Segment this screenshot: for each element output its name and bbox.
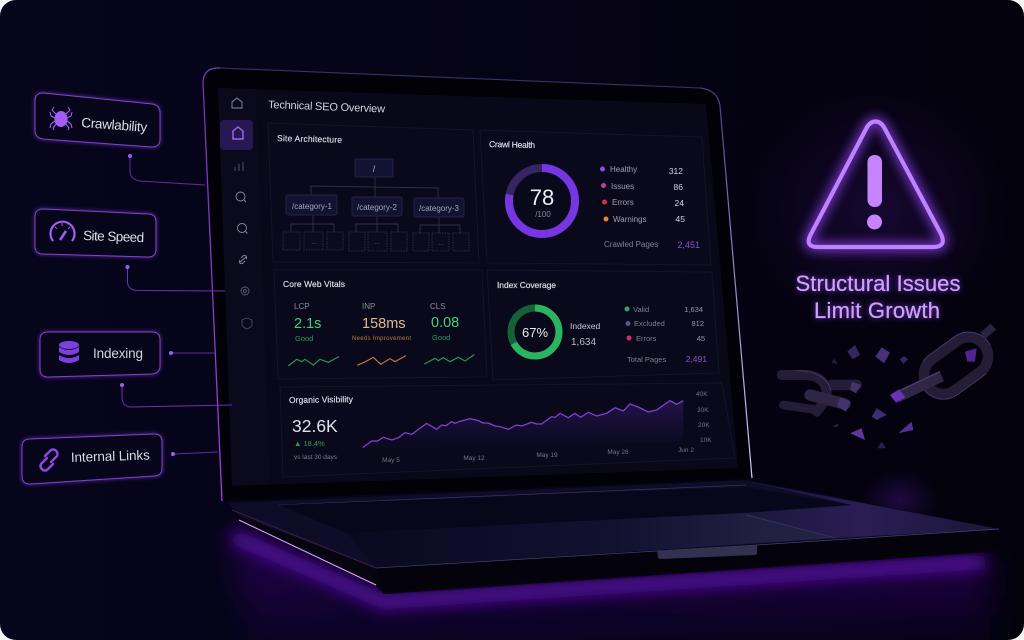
legend: crawl status: Errors <box>612 198 634 207</box>
icon: speed gauge <box>50 222 75 241</box>
panel: organic visibility: Organic Visibility <box>289 394 354 405</box>
panel: site architecture: /category-2 <box>357 203 398 212</box>
panel: index coverage: 1,634 <box>571 337 596 348</box>
panel: core web vitals: Good <box>295 334 313 343</box>
panel: crawl health: 78 <box>530 185 554 210</box>
legend: index status: 812 <box>691 319 704 328</box>
panel: core web vitals: CLS <box>430 302 446 311</box>
donut: 67% indexed <box>511 308 559 356</box>
label: Internal Links <box>22 434 162 484</box>
legend: crawl status: Crawled Pages <box>604 240 658 249</box>
panel: site architecture: ... <box>311 240 317 246</box>
floor glow under laptop <box>232 536 990 640</box>
panel: crawl health: /100 <box>535 210 551 219</box>
icon: chain link <box>41 450 57 470</box>
panel: organic visibility: 20K <box>698 422 710 429</box>
text: Structural Issues Limit Growth <box>796 271 960 323</box>
legend: crawl status: 86 <box>674 182 683 192</box>
legend: index status: 45 <box>697 334 705 343</box>
panel: site architecture: ... <box>438 241 444 247</box>
legend: crawl status: Issues <box>611 182 634 191</box>
panel: organic visibility: May 19 <box>536 452 558 459</box>
legend: crawl status: 312 <box>669 166 683 176</box>
panel: index coverage: Index Coverage <box>497 280 556 290</box>
panel: organic visibility: vs last 30 days <box>294 454 338 461</box>
panel: organic visibility: 40K <box>696 391 708 398</box>
legend: crawl status: 24 <box>675 198 684 208</box>
left chain <box>782 371 857 412</box>
panel: core web vitals <box>274 270 487 379</box>
text: Structural Issues Limit Growth: Limit Growth <box>814 298 940 323</box>
panel: organic visibility: May 26 <box>607 449 629 456</box>
panel: organic visibility <box>280 383 735 477</box>
panel: site architecture: /category-3 <box>419 204 460 213</box>
icon: database <box>59 341 79 363</box>
legend: crawl status: Warnings <box>613 215 646 224</box>
panel: organic visibility: ▲ 18.4% <box>294 439 325 448</box>
legend: index status: Errors <box>636 334 657 343</box>
laptop lid and screen <box>203 68 752 501</box>
panel: organic visibility: May 12 <box>463 455 485 462</box>
panel: index coverage: Indexed <box>570 321 601 331</box>
panel: core web vitals: Core Web Vitals <box>283 279 345 289</box>
label: Crawlability <box>35 93 160 147</box>
label: Internal Links: Internal Links <box>71 448 150 465</box>
panel: core web vitals: 2.1s <box>294 316 321 332</box>
legend: index status: Excluded <box>634 319 665 328</box>
panel: index coverage: 67% <box>522 325 548 340</box>
panel: organic visibility: 32.6K <box>292 416 338 436</box>
panel: crawl health <box>480 130 711 265</box>
panel: site architecture: / <box>373 164 376 174</box>
panel: site architecture: Site Architecture <box>277 133 342 145</box>
area line chart <box>363 401 683 450</box>
panel: index coverage <box>487 270 719 380</box>
panel: core web vitals: Needs Improvement <box>352 336 411 342</box>
panel: core web vitals: Good <box>432 333 450 342</box>
palm rest <box>584 513 834 554</box>
panel: core web vitals: 0.08 <box>431 315 459 331</box>
icon: spider <box>50 107 72 130</box>
right chain <box>918 332 994 399</box>
sparklines <box>288 355 474 366</box>
legend: index status: 1,634 <box>684 305 703 314</box>
sidebar <box>236 88 256 90</box>
icon: warning triangle <box>809 122 943 247</box>
panel: core web vitals: LCP <box>294 302 310 311</box>
legend: crawl status <box>600 165 700 250</box>
hinge notch <box>657 545 757 559</box>
panel: organic visibility: 10K <box>700 437 712 444</box>
panel: organic visibility: May 5 <box>382 457 400 464</box>
text: Structural Issues Limit Growth: Structural Issues <box>796 271 960 296</box>
panel: site architecture <box>268 123 479 263</box>
panel: crawl health: Crawl Health <box>489 139 535 150</box>
panel: organic visibility: Jun 2 <box>678 447 694 454</box>
label: Site Speed: Site Speed <box>83 228 144 245</box>
legend: index status: Valid <box>633 305 649 314</box>
label: Indexing: Indexing <box>93 346 143 361</box>
label: Indexing <box>40 332 160 377</box>
panel: core web vitals: INP <box>362 302 375 311</box>
label: Site Speed <box>35 209 156 257</box>
legend: crawl status: 45 <box>676 214 685 224</box>
heading: Technical SEO Overview: Technical SEO Overview <box>268 99 385 115</box>
sidebar icons <box>232 98 252 329</box>
legend: index status: 2,491 <box>686 354 707 364</box>
panel: site architecture: /category-1 <box>292 202 333 211</box>
donut: score 78 <box>509 168 575 234</box>
laptop base <box>229 480 999 594</box>
panel: core web vitals: 158ms <box>362 316 406 332</box>
connectors <box>120 154 232 456</box>
label: Crawlability: Crawlability <box>81 115 148 135</box>
keyboard <box>279 487 852 533</box>
fragments <box>831 345 913 448</box>
panel: site architecture: ... <box>374 240 380 246</box>
legend: crawl status: 2,451 <box>677 240 700 250</box>
panel: organic visibility: 30K <box>697 407 709 414</box>
legend: crawl status: Healthy <box>610 165 637 174</box>
broken chain <box>782 322 1003 448</box>
legend: index status: Total Pages <box>627 355 666 364</box>
legend: index status <box>624 305 707 364</box>
sidebar active item <box>220 120 253 150</box>
